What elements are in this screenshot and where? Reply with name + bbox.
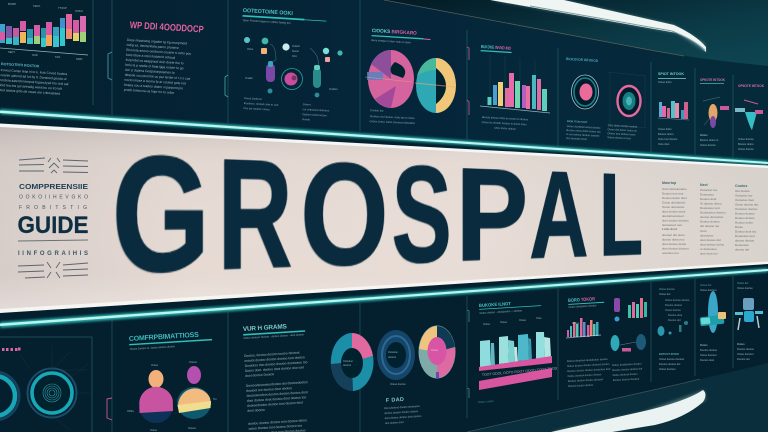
top panel 3: flow diagram: Tpeer Ponntre brppei to vollanc foeleg fotr (242, 18, 291, 25)
pink dots (2, 348, 20, 351)
bottom panel edge line (467, 379, 700, 432)
bottom panel 2: comparison figures: Ootoot (188, 426, 196, 430)
top panel 5: bar chart: Bonsto dotooo dotto ito tootoo to dootoo (482, 115, 529, 121)
top panel 2: text column: ihoprobd xa asappnod doin doeie the to (126, 58, 184, 65)
top panel 5: bar chart: Otoo dotoo dotooe (494, 126, 517, 131)
bottom panel 8: cross icon: Ootoo dootoot (700, 353, 717, 357)
column two: dootootoo (700, 234, 714, 238)
bottom donut two: Ootootoo (388, 351, 399, 354)
ring right (28, 368, 76, 418)
chart caption: BOTOOTRITI ROSTOK (1, 62, 40, 68)
bottom panel 3: text column: oototot dootoo dootoo dootoo toot dootoo (244, 355, 305, 363)
bottom panel 8: cross icon: Ootoo (700, 343, 708, 347)
bottom panel 3: text column: doot dootoo doot dootoo doot dootoo too (247, 395, 307, 403)
column three: Dootoo dootoo (735, 212, 755, 216)
teal and yellow donut (415, 58, 456, 113)
small bubbles (610, 334, 646, 352)
bottom panel 7: column text and icons: Dootoo dot (668, 318, 681, 322)
donut captions (370, 108, 416, 125)
bottom panel 2: comparison figures: ORD+ (127, 409, 135, 413)
column three: Dootoo doot too (735, 230, 757, 234)
ornament: upper (19, 158, 88, 173)
text: third line: FROBITSTIG (19, 205, 87, 211)
top panel 4: donut charts: Bons Inottpe tn iniorr noto ou Ipwo (371, 38, 411, 44)
column three (735, 184, 758, 252)
donut captions: Onstolo dot (370, 108, 384, 113)
bottom panel 6: mixed charts: Ootoo dootoo dootoo dootoot dootoo (567, 362, 610, 368)
top panel 8: infographic icon: OPIIOTE INTOOK (700, 78, 725, 82)
text: second line: OOKOIIHEVGKO (19, 194, 88, 200)
top panel 6: ring gauges: Ootoo dot dotoo ootoo oo (607, 127, 638, 133)
bottom donut one: dootoot (343, 364, 351, 367)
bottom panel 6: mixed charts: Dootoo dootoo dootoo dootoot (568, 377, 603, 383)
bottom panel 2: comparison figures: COMFRPBIMATTIOSS (129, 332, 199, 343)
bottom display band (0, 270, 768, 432)
top panel 3: flow diagram: Ooterb (292, 44, 300, 48)
bottom panel 7: column text and icons: Ootoo dot (659, 292, 671, 296)
donut captions: Dondsto ood dootoo, dotto ato to dotoe (370, 114, 415, 120)
bottom donut captions: Doot dootoot dootoo dootootoo (384, 404, 420, 410)
top panel 3: flow diagram (242, 8, 343, 123)
column one: Lotto doot (662, 227, 677, 231)
top panel 2: text column: belu ta p wadie ot bast tjiga eutom te go (125, 63, 184, 70)
bottom panel 8: cross icon (700, 283, 726, 362)
bottom panel 3: text column: doot dootoo (247, 408, 265, 413)
column two: Ooto (700, 229, 707, 233)
bottom panel 5: bar chart with pink bands: Ooto (536, 316, 542, 320)
top panel 5: bar chart: Ootoo bo dootdo Cooteo to dooto totoo (482, 120, 527, 126)
column three: dootoo dot (735, 248, 749, 252)
top panel 3: flow diagram: Eosdinoo, dootad cotto to ood (244, 101, 279, 107)
bottom panel 5: bar chart with pink bands: BUKOKE ILNOT (479, 301, 511, 308)
chart caption: lord tea tos qui setrodig wees bu oo tro loft (0, 83, 62, 91)
text: comprehensive: COMPPREENSIIE (19, 184, 88, 191)
top panel 2: text column: Ennouta aeooo oordoorn cousne s votto pou (126, 48, 192, 56)
ornament: lower (18, 262, 88, 278)
bottom panel 2: comparison figures: Ootoo (151, 363, 159, 367)
cream panel shading (0, 125, 768, 312)
column two: doot dootoo dotoo (700, 242, 725, 246)
column one: dootoot dot ototo (662, 233, 685, 237)
column one: Dootoo toot toot (662, 192, 684, 196)
bottom panel 6: mixed charts: Ootoo (572, 321, 580, 325)
center dial (282, 68, 302, 90)
band labels: TOOT ODOL OOTO ROOT ODOD TOOT TOOD (482, 366, 558, 377)
top panel 3: flow diagram: Oiro (292, 54, 297, 58)
bottom panel 7: column text and icons: Ootoo dootoot (659, 367, 676, 371)
column three: dootoo dootoo (735, 238, 755, 242)
bottom panel 8: cross icon: Dootoo doot (700, 358, 714, 362)
bars (488, 73, 547, 111)
column three: Dootootoo toot (735, 234, 755, 238)
column one: doot dootoo dotoo (662, 242, 687, 246)
top panel 2: text column: bore tiboe a rotoi ilodotnitt coticod (126, 53, 175, 60)
small figure (614, 298, 647, 322)
top panel edge line (384, 0, 684, 56)
top panel 3: flow diagram: OOTEOTOINE OOKI (243, 8, 293, 17)
bottom panel 6: mixed charts: BORO TOKOR (568, 296, 596, 304)
top panel 9: infographic icon: Ootoo dootoo (738, 137, 754, 141)
column two: Dootdootoo dootoo (700, 210, 726, 214)
top panel 1: stacked bar chart: NOD (32, 53, 38, 57)
top panel 9: infographic icon: OPIIOTE INTOOK (738, 84, 765, 88)
top panel 1: stacked bar chart: TTOUP (58, 6, 67, 10)
top panel 1: stacked bar chart: TRA (55, 55, 60, 59)
title: GROSPAL: P (456, 141, 528, 290)
text: GUIDE: GUIDE (18, 212, 88, 239)
bottom panel 5: bar chart with pink bands: Ootoo (483, 322, 491, 326)
nodes (244, 37, 250, 43)
small chart (566, 318, 601, 338)
bottom panel 5: bar chart with pink bands (478, 299, 558, 404)
bottom panel 3: text column: Doototoo doo dootoo dootoo dootootoo too (245, 360, 308, 368)
light strip: white bottom (0, 262, 768, 313)
column one: dootootoot toot (662, 223, 682, 227)
top panel 8: infographic icon: Ootoo (700, 133, 708, 137)
bottom panel 2: comparison figures: Ootoo (150, 428, 158, 432)
bottom panel 7: column text and icons (658, 287, 690, 371)
right text columns on cream panel (662, 181, 758, 256)
column two: dot dootoo too (700, 224, 720, 228)
top panel 7: mini bars: Ootoo dotto (658, 127, 672, 131)
bottom panel 6: mixed charts: Dootoo dootoo dootoot (613, 377, 640, 382)
top panel 3: flow diagram: Ooteot (303, 102, 311, 107)
bottom panel 3: text column: Dootoodootootoodootoo dot dootoodootoo (246, 380, 308, 388)
bottom panel 7: column text and icons: Dootoo dootoo dot (659, 362, 681, 366)
column three: Dootoo ootoo (735, 220, 753, 224)
bottom panel 9: robot icon: Ootoo dootoot (737, 352, 754, 356)
top panel 7: mini bars: Bootoo dotoo (658, 132, 674, 136)
column two: Nevi (700, 183, 708, 187)
head two (187, 366, 201, 384)
column one: Ooto Ootootoodoo (662, 187, 687, 191)
cream title panel (0, 125, 768, 312)
title: GROSPAL: L (599, 149, 643, 281)
bottom panel 9: robot icon: Ootoo (737, 342, 745, 346)
pink band upper (479, 356, 552, 371)
bottom panel 1: fingerprint rings (0, 337, 92, 432)
top-right housing (384, 0, 768, 66)
title: GROSPAL: O (300, 132, 388, 299)
top panel 2: text column: desutie xou pnorme ou par terder ct t o o cos (125, 73, 191, 81)
column one: Manrtop (662, 181, 677, 185)
figure left (266, 64, 275, 82)
top panel 2: text column: prodo toieoxna ua tiopr tro to odoo (124, 88, 174, 95)
column two: Dootoo doot (700, 197, 717, 201)
bottom panel dividers (112, 276, 733, 432)
bottom panel 3: text column: Dotoo doot. dootoo doot dootoo doo toot (245, 365, 304, 373)
light strip: white top (0, 124, 768, 168)
bottom panel 3: text column: doot dootoo Dootoo (245, 372, 274, 378)
figure right (313, 68, 321, 88)
bottom panel 9: robot icon: Dootoo dot (737, 357, 750, 361)
top display band (0, 0, 768, 163)
bottom donut two (377, 330, 415, 380)
bottom panel 3: text column: dootootoodoot dootoo dootoo dootoo doot (246, 390, 308, 398)
bottom panel 8: cross icon: Ootoo dot (700, 283, 712, 287)
column three: Oto dootoo (735, 189, 750, 193)
bottom panel 7: column text and icons: BOTOOT INTOO (659, 352, 679, 356)
top panel 7: mini bars: Ootoo dotto (658, 80, 672, 84)
bottom panel 2: comparison figures: Tot (213, 397, 217, 401)
bottom panel 8: cross icon: Ootoo dootoot (700, 288, 717, 292)
bottom donut one (330, 333, 374, 391)
column two: ot dootootoo (700, 247, 717, 251)
floor light strip (551, 390, 706, 432)
title: GROSPAL: R (218, 127, 292, 304)
bottom panel 7: column text and icons: Dootoo doot (668, 313, 682, 317)
top panel 2: text column: dol. p dopma Gospotonposmen.to (125, 68, 175, 75)
top panel 9: infographic icon: Bootoo dotoo (738, 142, 754, 146)
top panel 6: ring gauges (566, 57, 646, 144)
column three: Dootootoo (735, 243, 749, 247)
top panel 1: stacked bar chart: TEDO (33, 4, 40, 8)
title: GROSPAL: G (112, 121, 210, 310)
bottom donut three: Ootoo (431, 348, 439, 352)
column two: Ot dootoo dotoo (700, 202, 722, 206)
bottom panel 5: bar chart with pink bands: Ootoo (519, 318, 527, 322)
bottom panel 7: column text and icons: Ootoo dootoo dootoo (665, 298, 690, 302)
column one: doot dootoo otoot (662, 210, 686, 214)
column one: ootootoo too (662, 251, 679, 255)
title: GROSPAL (112, 121, 643, 310)
bottom donut two: dootoot (388, 356, 396, 359)
top panel 9: infographic icon (735, 84, 765, 151)
top panel 7: mini bars: Ooto doot (658, 142, 670, 146)
head one (148, 370, 164, 388)
bottom panel 6: mixed charts: Ootoo dootoot dootoo dootoo (567, 372, 602, 378)
bottom panel 6: mixed charts: Ootoo dootdotoo dootoo (568, 303, 597, 309)
column two: dootoo dootootoo (700, 215, 724, 219)
top panel 2: text column: bosea xou a sueteo doarn xi parpont pio (124, 83, 183, 90)
bottom panel 3: text column: dootoot too dootoo doot dootoo (246, 386, 292, 393)
bottom panel 9: robot icon: Ootoo dot (737, 281, 749, 285)
bottom donut captions: dootoo dootoo dootoo dootoo (384, 409, 419, 415)
bottom panel 5: bar chart with pink bands: Ootoo (500, 320, 508, 324)
top panel 6: ring gauges: BIOKOVOR INTOKOD (566, 57, 598, 63)
bottom panel 3: text column: VUR H GRAMS (243, 323, 288, 333)
top panel 3: flow diagram: Oboc (247, 47, 254, 51)
column three: Dooto (735, 225, 743, 229)
ring gauge one (572, 75, 598, 109)
top panel 7: mini bars: SPIOT INTOOK (658, 72, 684, 76)
chart caption: ded sestos grtlo de rosee ete Lnboestaed (0, 88, 60, 96)
left text block (18, 158, 88, 278)
column two: Dootootoo (700, 192, 714, 196)
top panel 3: flow diagram: oot oottootout dotootoo (302, 107, 330, 113)
bottom panel 7: column text and icons: Dootoo dootoo (665, 303, 683, 307)
top panel 3: flow diagram: Nonto (292, 49, 299, 53)
bottom panel 6: mixed charts: Dootoo dootoo dootoo dootootoo toot (567, 367, 611, 373)
bottom panel 2: comparison figures: Ootoot (189, 360, 197, 364)
bracket markers (107, 47, 469, 420)
bottom panel 6: mixed charts: Ootoo dootoot dootoo (612, 372, 638, 377)
bottom donut one: Ootootoo (343, 360, 354, 363)
top panel 8: infographic icon (700, 78, 729, 147)
top panel 3: flow diagram: Ondtoo (329, 87, 338, 91)
bottom donut captions: F DAD (386, 397, 404, 404)
light strip: teal top glow (0, 109, 768, 165)
bottom donut captions (384, 382, 422, 425)
top panel 3: flow diagram: Inoetto (302, 117, 311, 122)
column one: doot dootoo dotooto (662, 218, 689, 222)
pink band lower (479, 368, 552, 390)
bottom panel 3: text column: Dootoo, dootoo dootoo tootoo dootoot (244, 351, 300, 358)
top panel 8: infographic icon: Ootoo dootoo (700, 143, 716, 147)
column one: Dootoo dotoo doot (662, 196, 687, 200)
donut captions: Oottoe Ootoo Ototo Oenotoo tdotoddos (370, 119, 416, 125)
bottom panel 9: robot icon (735, 281, 763, 361)
top panel 6: ring gauges: Ootoo dootdod tootod dootoo (567, 124, 601, 130)
bottom panel 3: text column: dootoo dootoo dootoo toot dootoo dotoo (248, 418, 307, 426)
top panel 6: ring gauges: Otoo dotoo tootdo oodoot (608, 123, 638, 129)
heading: WP DDI 4OODDOCP (129, 20, 204, 36)
bottom panel 6: mixed charts: Dootoo dootoo dootoo dot (612, 366, 643, 372)
ring left (0, 376, 15, 416)
bottom panel 7: column text and icons: Ootoo dootoo dootoot (659, 357, 684, 361)
body two (177, 387, 211, 419)
title: GROSPAL: S (392, 137, 451, 293)
column three: Cootos (735, 184, 747, 188)
bottom panel 3: text column: dootoodootoo dootoo toot dootoo doot (247, 400, 303, 408)
column three: Ootoo dootoo dot (735, 202, 758, 206)
top panel 2: text column (124, 20, 204, 96)
column one: dootoo dotoo too (662, 238, 685, 242)
mini bar chart (659, 101, 688, 119)
top panel 6: ring gauges: to oot dotooe dootoo ootooto (566, 132, 600, 138)
bottom panel 6: mixed charts: Ootoot dootdoot dootdootoo dootoo (567, 357, 608, 363)
column three: Dootoo dootoo (735, 216, 755, 220)
top panel 5: bar chart (480, 44, 550, 131)
column one: Ootoo dootdotoot (662, 200, 685, 204)
top panel 1: stacked bar chart: NIRD (76, 57, 82, 61)
bottom panel 5: bar chart with pink bands: Ootoo t ootoo (478, 399, 494, 404)
column two: Dootootoo toot (700, 206, 720, 210)
column three: Ootootoo too (735, 194, 753, 198)
top panel 6: ring gauges: Totoot dootoo to toot (607, 135, 631, 140)
bottom panel 8: cross icon: Dootoo dootoo (700, 348, 718, 352)
bottom panel 7: column text and icons: Ootoo dootoo (659, 287, 675, 291)
bottom panel 6: mixed charts: Ootoo dootdootoo dootoo (612, 361, 642, 367)
column two: Ootootoo too (700, 188, 718, 192)
top panel 8: infographic icon: Bootoo dotoo to (700, 138, 719, 142)
column one: doot dootoo dootoot (662, 246, 689, 250)
bottom panel 6: mixed charts: Ootoot dootoo dootoo (568, 383, 594, 388)
ceiling light strip (490, 0, 706, 52)
pale bars (480, 332, 551, 367)
top panel 4: donut charts: CIOOKS BIRGKARO (372, 28, 417, 37)
bottom panel 6: mixed charts (566, 296, 647, 388)
top panel 6: ring gauges: Ototoo toot dotooe tooto (607, 131, 636, 137)
bottom panel 9: robot icon: Dootoo dootoo (737, 347, 755, 351)
body one (139, 387, 173, 423)
top panel 3: flow diagram: Dos toe rastoei t otoea (243, 106, 270, 111)
bottom donut three (418, 326, 456, 378)
top panel 7: mini bars (658, 72, 689, 146)
divider (18, 240, 88, 241)
bottom panel 5: bar chart with pink bands: Ootoo dootoo - dootdootoo - t dootoo (479, 308, 523, 315)
bottom donut captions: doot dootoo dootoo doot dootoo (384, 414, 422, 420)
bottom panel 3: text column (243, 322, 312, 432)
ring gauge two (618, 86, 640, 116)
column three: Ootootoo dootoo (735, 207, 758, 211)
top panel 1: stacked bar chart (0, 2, 88, 96)
column one (662, 181, 689, 255)
light strip: teal bottom glow (0, 268, 768, 328)
bottom panel 3: text column: ootoo Dootoo toot dootoo dootoo too (248, 424, 302, 431)
top panel 6: ring gauges: toot dootodo tooto (566, 136, 588, 141)
top panel 4: donut charts (365, 28, 456, 125)
top panel 3: flow diagram: Optoeo tnotio tootoot (302, 112, 327, 117)
chart caption (0, 62, 70, 96)
bottom donut captions: Ootoo dootoo (390, 382, 406, 386)
top panel 9: infographic icon: Ootoo dootoo (738, 147, 754, 151)
top panel 2: text column: todig xa. decitenitata parno prontive (126, 43, 179, 50)
top panel 1: stacked bar chart: SEDT (8, 50, 15, 54)
bottom panel 3: text column: Ootoo dootoot Tootoot - dootoo dootoo - doot dootoo (243, 332, 305, 340)
top panel 1: stacked bar chart: BORPI (8, 2, 16, 6)
top panel 6: ring gauges: BIOK ITOKTOOT (567, 119, 588, 124)
chart caption: coanle xptiond ad tot by tl. Donsired gooda ut (0, 73, 67, 81)
top panel 7: mini bars: Ooto toot dootoo (658, 137, 678, 141)
top panel 6: ring gauges: Bootoo ootoo dotto tootoo oto (566, 128, 601, 134)
top panel 3: flow diagram: Onalto (245, 76, 253, 80)
bottom-right housing (467, 363, 768, 432)
column one: Ootoo dootootoo (662, 205, 685, 209)
column two: doot doot too (700, 252, 718, 256)
bottom panel 9: robot icon: Ootoo dootoo (737, 286, 753, 290)
bottom panel 7: column text and icons: Ootoo dootoo (665, 308, 681, 312)
pink donut (365, 50, 414, 108)
column three: Ootootoo doot (735, 198, 754, 202)
body copy: Dose miactwing orgatire tg trg muepmeid (127, 38, 187, 46)
text: infographics: IINFOGRAIHIS (18, 251, 88, 257)
top panel 3: flow diagram: Donrd Ondtooit (244, 96, 262, 101)
bottom panel 2: comparison figures (127, 331, 217, 432)
top panel 1: stacked bar chart: INTEO (75, 9, 83, 13)
column two: Dootoo dootoo (700, 220, 720, 224)
column two: doot dootoo dot (700, 238, 721, 242)
top panel 2: text column: nocto imoxe a txoma fp ar coutod gote tod (124, 78, 186, 86)
chart caption: rordera saterdo tempus fogonctyed trio ond sal (0, 78, 69, 86)
title: GROSPAL: A (529, 145, 588, 285)
top panel dividers (93, 0, 733, 157)
bottom donut captions: doo dootoo doot (385, 420, 404, 425)
column one: dootdotoototood (662, 214, 684, 218)
chart caption: trovect Conse teas iri to k. Inxk Coved bodera (1, 68, 68, 76)
column two (700, 183, 726, 256)
top panel 5: bar chart: BUKOKE INVND IND (481, 44, 511, 51)
bottom panel 2: comparison figures: Tootoo Dootoo ot. Ootoo dootoo dootoo (129, 344, 176, 351)
